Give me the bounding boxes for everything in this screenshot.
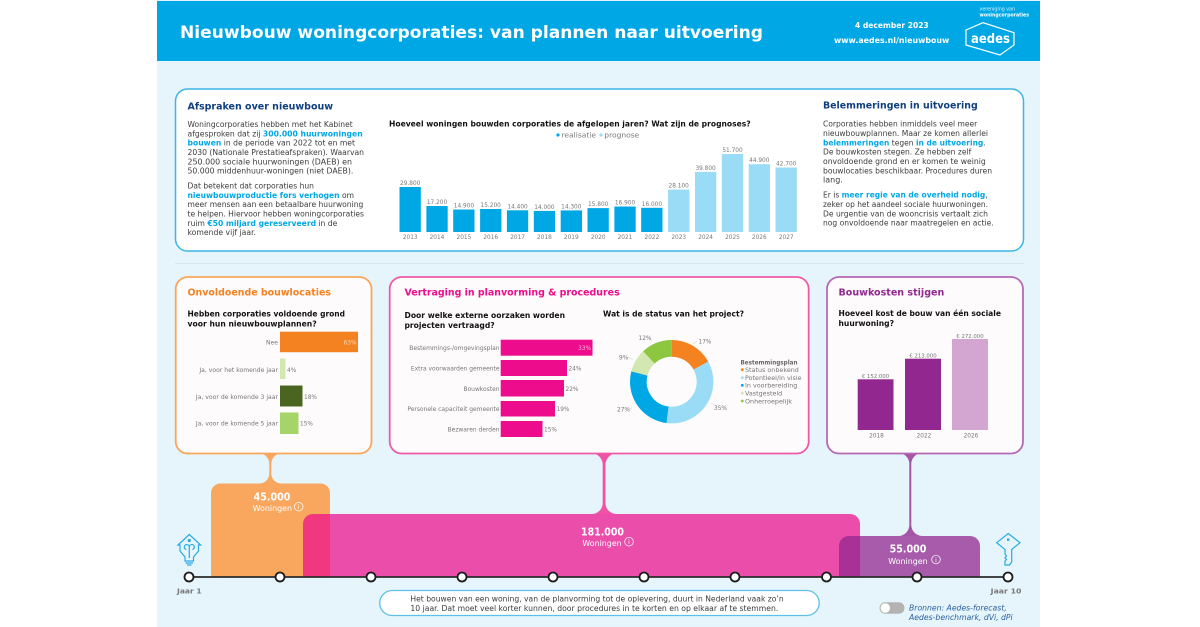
bar chart: woningen per jaar: 2026 — [752, 235, 767, 241]
bar chart: woningen per jaar: 14.000 — [534, 205, 555, 211]
bar chart: bouwkosten: 2018 — [869, 434, 884, 440]
donut chart: status project: 17% — [698, 340, 712, 346]
bar chart: woningen per jaar: 2014 — [430, 235, 445, 241]
text block: belemmeringen in uitvoering: De bouwkosten stegen. Ze hebben zelf — [823, 148, 971, 157]
callout: bouwtijd — [380, 590, 819, 616]
timeline block: 55.000 woningen — [839, 453, 980, 577]
text block: afspraken over nieuwbouw: nieuwbouwproductie fors verhogen om — [188, 191, 354, 200]
text block: belemmeringen in uitvoering: nog onvoldoende naar maatregelen en actie. — [823, 219, 994, 228]
legend: bestemmingsplan: Vastgesteld — [745, 390, 782, 398]
label: jaar 1: Jaar 1 — [176, 588, 202, 596]
panel: onvoldoende bouwlocaties — [176, 277, 372, 454]
text block: belemmeringen in uitvoering: zeker op het aandeel sociale huurwoningen. — [823, 200, 988, 209]
donut chart: status project: 35% — [714, 406, 727, 412]
bar chart: externe oorzaken: 19% — [556, 407, 570, 413]
sources: Bronnen: Aedes-forecast, — [909, 604, 1007, 612]
date: 4 december 2023 — [855, 21, 929, 30]
bar chart: externe oorzaken — [407, 340, 592, 437]
heading: Vertraging in planvorming & procedures — [404, 288, 620, 298]
bar chart: bouwkosten: € 213.000 — [909, 354, 937, 360]
donut chart: status project: 9% — [619, 356, 629, 362]
text block: afspraken over nieuwbouw: Dat betekent dat corporaties hun — [188, 182, 314, 190]
bar chart: voldoende grond: 18% — [304, 395, 317, 401]
bar chart: woningen per jaar: 2019 — [564, 235, 579, 241]
legend: bestemmingsplan: Onherroepelijk — [745, 397, 792, 405]
bar chart: woningen per jaar: 2020 — [591, 235, 606, 241]
bar chart: externe oorzaken: Personele capaciteit gemeente — [407, 406, 500, 413]
text block: afspraken over nieuwbouw: meer mensen aan een betaalbare huurwoning — [188, 200, 363, 209]
icon: key — [997, 534, 1020, 565]
bar chart: externe oorzaken: Extra voorwaarden gemeente — [411, 366, 500, 372]
question: huurwoning? — [838, 319, 894, 328]
bar chart: woningen per jaar: 16.000 — [642, 202, 662, 208]
bar chart: externe oorzaken: Bouwkosten — [463, 386, 500, 393]
bar chart: woningen per jaar: 2024 — [698, 235, 713, 241]
page background — [157, 0, 1040, 627]
legend: bestemmingsplan: Potentieel/in visie — [745, 374, 802, 382]
timeline block: 181.000 woningen: Woningen — [582, 538, 622, 548]
text block: belemmeringen in uitvoering — [823, 100, 994, 228]
bar chart: woningen per jaar — [389, 120, 797, 241]
legend: bestemmingsplan: In voorbereiding — [745, 382, 797, 390]
bar chart: woningen per jaar: 2018 — [537, 235, 552, 241]
timeline block: 181.000 woningen: i — [628, 539, 630, 546]
bar chart: woningen per jaar: 28.100 — [669, 184, 689, 190]
bar chart: voldoende grond: Nee — [266, 340, 278, 346]
bar chart: externe oorzaken: 22% — [566, 387, 579, 393]
bar chart: voldoende grond: 15% — [300, 422, 313, 428]
bar chart: woningen per jaar: 2016 — [483, 235, 498, 241]
bar chart: voldoende grond: 63% — [344, 340, 357, 346]
donut chart: status project: 27% — [617, 408, 630, 414]
panel: vertraging in planvorming en procedures — [390, 277, 809, 454]
text block: afspraken over nieuwbouw: ruim €50 miljard gereserveerd in de — [188, 219, 337, 228]
question — [188, 310, 345, 328]
question: oorzaken: projecten vertraagd? — [404, 321, 495, 330]
bar chart: woningen per jaar: 15.200 — [481, 203, 501, 209]
timeline block: 45.000 woningen: 45.000 — [254, 492, 290, 504]
question: Hebben corporaties voldoende grond — [188, 310, 345, 318]
bar chart: woningen per jaar: 42.700 — [776, 162, 797, 168]
sources — [908, 604, 1013, 622]
heading: Bouwkosten stijgen — [838, 288, 944, 298]
panel: bouwkosten stijgen — [827, 277, 1023, 454]
legend: bestemmingsplan: Bestemmingsplan — [740, 360, 798, 366]
bar chart: woningen per jaar: 2013 — [403, 235, 418, 241]
text block: belemmeringen in uitvoering: belemmeringen tegen in de uitvoering. — [823, 138, 986, 147]
bar chart: woningen per jaar: 39.800 — [695, 166, 716, 172]
bar chart: woningen per jaar: 14.400 — [507, 204, 528, 210]
bar chart: woningen per jaar: 17.200 — [427, 200, 447, 206]
bar chart: woningen per jaar: 2017 — [510, 235, 525, 241]
donut chart: status project — [617, 336, 727, 415]
timeline block: 45.000 woningen: Woningen — [253, 503, 292, 513]
bar chart: bouwkosten — [858, 334, 988, 440]
timeline block: 181.000 woningen: 181.000 — [581, 526, 624, 538]
bar chart: externe oorzaken: 24% — [568, 366, 582, 372]
legend: bestemmingsplan — [740, 360, 802, 405]
bar chart: externe oorzaken: 15% — [544, 428, 557, 434]
bar chart: woningen per jaar: 2027 — [779, 235, 794, 241]
title: Nieuwbouw woningcorporaties: van plannen naar uitvoering — [180, 23, 763, 43]
timeline block: 181.000 woningen — [303, 453, 860, 577]
bar chart: bouwkosten: 2022 — [917, 434, 932, 440]
timeline block: 55.000 woningen: 55.000 — [890, 544, 926, 556]
text block: afspraken over nieuwbouw: komende vijf jaar. — [188, 228, 256, 237]
toggle switch — [880, 602, 904, 614]
text block: afspraken over nieuwbouw — [188, 102, 364, 237]
text block: belemmeringen in uitvoering: De urgentie van de wooncrisis vertaalt zich — [823, 209, 988, 218]
bar chart: voldoende grond — [195, 332, 358, 434]
text block: belemmeringen in uitvoering: bouwlocaties beschikbaar. Procedures duren — [823, 166, 992, 175]
bar chart: woningen per jaar: 2021 — [618, 235, 633, 241]
icon: house bulb — [178, 534, 201, 565]
text block: afspraken over nieuwbouw: bouwen in de periode van 2022 tot en met — [188, 139, 355, 148]
question: oorzaken — [404, 311, 565, 330]
bar chart: woningen per jaar: 2022 — [645, 235, 660, 241]
bar chart: woningen per jaar: 44.900 — [749, 158, 770, 164]
sources: Aedes-benchmark, dVi, dPi — [908, 613, 1013, 622]
bar chart: woningen per jaar: realisatie — [562, 130, 596, 140]
text block: belemmeringen in uitvoering: Belemmeringen in uitvoering — [823, 100, 978, 112]
logo: aedes: woningcorporaties — [980, 12, 1029, 18]
bar chart: voldoende grond: Ja, voor de komende 5 jaar — [195, 421, 278, 428]
text block: belemmeringen in uitvoering: nieuwbouwplannen. Maar ze komen allerlei — [823, 129, 988, 138]
timeline block: 55.000 woningen: Woningen — [888, 556, 928, 566]
bar chart: externe oorzaken: Bestemmings-/omgevingsplan — [409, 345, 500, 352]
logo: aedes: vereniging van — [980, 6, 1015, 12]
question: Hoeveel kost de bouw van één sociale — [838, 309, 1001, 318]
label: jaar 10: Jaar 10 — [990, 588, 1022, 596]
website: www.aedes.nl/nieuwbouw — [834, 36, 950, 45]
text block: afspraken over nieuwbouw: Afspraken over nieuwbouw — [188, 102, 333, 112]
bar chart: voldoende grond: Ja, voor het komende jaar — [198, 367, 278, 374]
text block: belemmeringen in uitvoering: onvoldoende grond en er komen te weinig — [823, 157, 986, 166]
timeline — [176, 572, 1022, 596]
timeline block: 55.000 woningen: i — [935, 557, 937, 564]
bar chart: woningen per jaar: 2025 — [725, 235, 740, 241]
bar chart: woningen per jaar: Hoeveel woningen bouwden corporaties de afgelopen jaren? Wat zijn de prognoses? — [389, 120, 751, 128]
bar chart: woningen per jaar: 16.900 — [615, 200, 635, 206]
bar chart: woningen per jaar: 2015 — [457, 235, 472, 241]
question: status: Wat is de status van het project? — [603, 310, 744, 318]
callout: bouwtijd: Het bouwen van een woning, van de planvorming tot de oplevering, duurt in Nederland vaak zo’n — [410, 594, 784, 604]
bar chart: woningen per jaar: 51.700 — [722, 148, 743, 154]
donut chart: status project: 12% — [638, 336, 652, 342]
text block: afspraken over nieuwbouw: 50.000 middenhuur-woningen (niet DAEB). — [188, 167, 353, 176]
text block: afspraken over nieuwbouw: 2030 (Nationale Prestatieafspraken). Waarvan — [188, 148, 364, 157]
bar chart: bouwkosten: € 152.000 — [862, 374, 890, 380]
text block: belemmeringen in uitvoering: Er is meer regie van de overheid nodig, — [823, 191, 988, 200]
question: oorzaken: Door welke externe oorzaken worden — [404, 311, 565, 320]
timeline block: 45.000 woningen — [211, 453, 330, 577]
header band — [157, 1, 1040, 61]
panel: top summary — [176, 89, 1024, 251]
bar chart: externe oorzaken: Bezwaren derden — [448, 426, 500, 434]
bar chart: woningen per jaar: prognose — [604, 130, 640, 140]
bar chart: voldoende grond: Ja, voor de komende 3 jaar — [195, 394, 278, 401]
bar chart: woningen per jaar: 15.800 — [588, 202, 609, 208]
question — [838, 309, 1001, 328]
bar chart: externe oorzaken: 33% — [578, 346, 591, 352]
text block: afspraken over nieuwbouw: Woningcorporaties hebben met het Kabinet — [188, 120, 353, 129]
bar chart: woningen per jaar: 14.300 — [561, 204, 582, 210]
bar chart: voldoende grond: 4% — [287, 368, 297, 374]
callout: bouwtijd: 10 jaar. Dat moet veel korter kunnen, door procedures in te korten en op elkaar af te stemmen. — [410, 604, 778, 613]
logo: aedes: aedes — [971, 32, 1010, 47]
bar chart: woningen per jaar: 29.800 — [400, 181, 421, 187]
text block: belemmeringen in uitvoering: lang. — [823, 176, 843, 185]
text block: afspraken over nieuwbouw: 250.000 sociale huurwoningen (DAEB) en — [188, 157, 352, 166]
timeline block: 45.000 woningen: i — [298, 504, 300, 511]
bar chart: woningen per jaar: 2023 — [671, 235, 686, 241]
text block: belemmeringen in uitvoering: Corporaties hebben inmiddels veel meer — [823, 120, 978, 128]
text block: afspraken over nieuwbouw: te helpen. Hiervoor hebben woningcorporaties — [188, 210, 364, 218]
bar chart: bouwkosten: 2026 — [964, 434, 979, 440]
logo: aedes — [966, 6, 1029, 55]
bar chart: woningen per jaar: 14.900 — [454, 204, 474, 210]
text block: afspraken over nieuwbouw: afgesproken dat zij 300.000 huurwoningen — [188, 129, 363, 138]
heading: Onvoldoende bouwlocaties — [188, 288, 331, 298]
question: voor hun nieuwbouwplannen? — [188, 320, 317, 328]
bar chart: bouwkosten: € 272.000 — [956, 334, 984, 340]
legend: bestemmingsplan: Status onbekend — [745, 366, 799, 374]
